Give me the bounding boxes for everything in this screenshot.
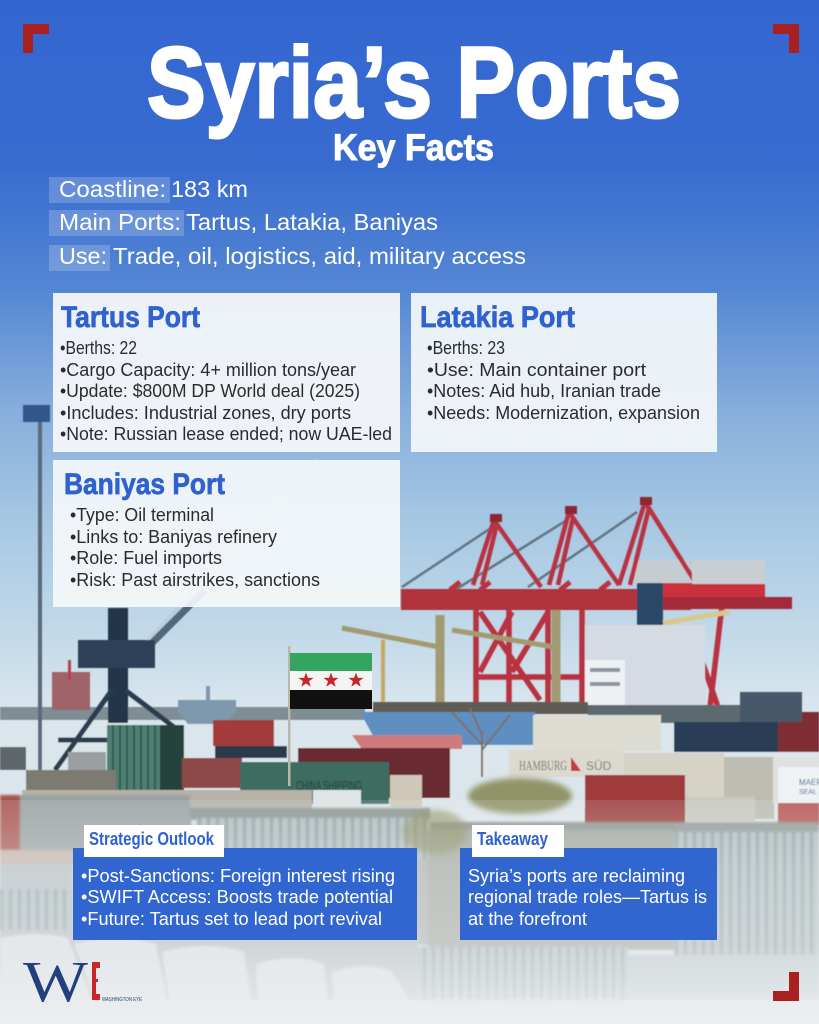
key facts list xyxy=(49,176,526,271)
list: Tartus facts: •Cargo Capacity: 4+ million tons/year xyxy=(60,360,356,380)
fact: use: Use: xyxy=(59,243,107,269)
bottom fog overlay xyxy=(0,800,819,1024)
list: Latakia facts: •Needs: Modernization, expansion xyxy=(427,403,700,423)
fact: coastline: Coastline: xyxy=(59,176,166,202)
list: Tartus facts: •Includes: Industrial zones, dry ports xyxy=(60,403,351,423)
heading: Latakia Port: Latakia Port xyxy=(420,301,575,334)
fact: use: Trade, oil, logistics, aid, military access xyxy=(113,243,526,269)
icon: Syrian flag xyxy=(288,646,372,786)
red gantry cranes xyxy=(401,501,792,707)
white ship superstructure xyxy=(585,625,705,710)
crane machinery house xyxy=(692,560,765,584)
corner bracket bottom right xyxy=(773,972,799,1001)
panel: Latakia Port xyxy=(411,293,717,452)
tab: Takeaway: Takeaway xyxy=(477,828,549,849)
list: Latakia facts: •Notes: Aid hub, Iranian trade xyxy=(427,381,661,401)
shipping containers: CHINA SHIPPING xyxy=(296,778,362,793)
heading: Tartus Port: Tartus Port xyxy=(61,301,200,334)
white tarps on foreground xyxy=(0,934,414,1006)
list: Baniyas facts: •Links to: Baniyas refinery xyxy=(70,527,277,547)
list: Baniyas facts: •Role: Fuel imports xyxy=(70,548,222,568)
list: Latakia facts: •Use: Main container port xyxy=(427,360,646,380)
light pole xyxy=(23,405,50,797)
takeaway text: at the forefront xyxy=(468,908,587,929)
logo: Washington Eye: WASHINGTON EYE xyxy=(102,997,143,1003)
cargo ship hull xyxy=(352,692,819,752)
background port photo scene xyxy=(0,405,819,825)
list: Baniyas facts xyxy=(70,505,320,590)
corner bracket top left xyxy=(23,24,49,53)
list: outlook points: •Future: Tartus set to lead port revival xyxy=(81,908,382,929)
list: Latakia facts: •Berths: 23 xyxy=(427,338,505,358)
list: Tartus facts: •Note: Russian lease ended; now UAE-led xyxy=(60,424,392,444)
shipping containers: HAMBURG xyxy=(519,759,567,774)
fact: main ports: Main Ports: xyxy=(59,209,181,235)
list: Baniyas facts: •Risk: Past airstrikes, sanctions xyxy=(70,570,320,590)
list: Latakia facts xyxy=(427,338,700,423)
fact: coastline: 183 km xyxy=(171,176,248,202)
takeaway text xyxy=(468,865,707,929)
list: Tartus facts xyxy=(60,338,392,444)
fact: main ports xyxy=(49,209,438,236)
tab: Strategic Outlook: Strategic Outlook xyxy=(89,828,215,849)
list: Baniyas facts: •Type: Oil terminal xyxy=(70,505,214,525)
dark harbour crane xyxy=(55,460,318,770)
shipping containers: SÜD xyxy=(586,759,612,773)
logo: Washington Eye: W xyxy=(23,949,88,1014)
washed lower port foreground xyxy=(0,795,819,1024)
corner bracket top right xyxy=(773,24,799,53)
list: outlook points: •SWIFT Access: Boosts trade potential xyxy=(81,886,393,907)
panel: Takeaway xyxy=(460,825,717,940)
ship funnel xyxy=(637,583,663,640)
logo: Washington Eye xyxy=(23,949,143,1014)
title: Syria’s Ports xyxy=(147,27,681,139)
list: Tartus facts: •Berths: 22 xyxy=(60,338,137,358)
shipping containers: SEAL xyxy=(799,789,817,796)
list: outlook points xyxy=(81,865,395,929)
yellow dockside cranes xyxy=(342,610,729,703)
panel: Baniyas Port xyxy=(53,460,400,607)
panel: Strategic Outlook xyxy=(73,825,417,940)
tab: Strategic Outlook xyxy=(84,825,224,857)
list: outlook points: •Post-Sanctions: Foreign interest rising xyxy=(81,865,395,886)
fact: main ports: Tartus, Latakia, Baniyas xyxy=(186,209,438,235)
panel: Tartus Port xyxy=(53,293,400,452)
takeaway text: Syria’s ports are reclaiming xyxy=(468,865,685,886)
bare tree xyxy=(452,708,510,777)
fact: coastline xyxy=(49,176,248,203)
shipping containers xyxy=(0,715,819,825)
olive bushes xyxy=(403,778,572,854)
heading: Baniyas Port: Baniyas Port xyxy=(64,468,225,501)
tab: Takeaway xyxy=(472,825,564,857)
takeaway text: regional trade roles—Tartus is xyxy=(468,886,707,907)
list: Tartus facts: •Update: $800M DP World deal (2025) xyxy=(60,381,360,401)
subtitle: Key Facts xyxy=(333,127,494,168)
